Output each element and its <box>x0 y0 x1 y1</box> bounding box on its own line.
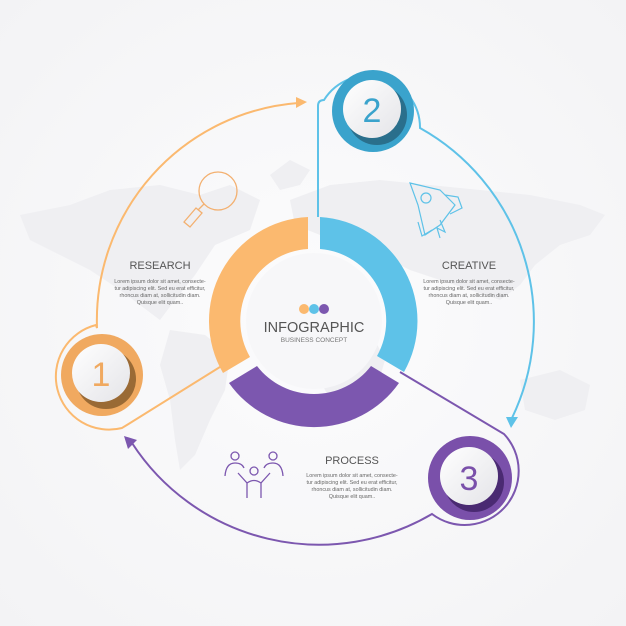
purple connector with arrow <box>124 372 519 545</box>
center title: INFOGRAPHIC <box>264 320 364 336</box>
world map background <box>20 160 605 470</box>
text block: process: tur adipiscing elit. Sed eu erat efficitur, <box>306 480 398 486</box>
orange connector with arrow <box>56 97 307 430</box>
number circle 2 <box>332 70 414 152</box>
icon: people <box>225 452 283 498</box>
text block: creative: tur adipiscing elit. Sed eu erat efficitur, <box>424 286 515 292</box>
center ring <box>209 217 417 427</box>
number circle 3: 3 <box>460 460 478 498</box>
text block: research <box>114 260 206 306</box>
text block: research: Lorem ipsum dolor sit amet, consecte- <box>114 279 206 285</box>
number circle 2: 2 <box>363 92 381 130</box>
center title <box>264 304 364 344</box>
text block: research: Quisque elit quam.. <box>137 300 183 306</box>
text block: creative: Lorem ipsum dolor sit amet, consecte- <box>423 279 515 285</box>
text block: creative: rhoncus diam at, sollicitudin diam. <box>429 293 509 299</box>
text block: process: Lorem ipsum dolor sit amet, consecte- <box>306 473 398 479</box>
text block: research: RESEARCH <box>129 260 191 272</box>
icon: rocket <box>410 183 462 238</box>
blue connector with arrow <box>318 76 534 428</box>
number circle 3 <box>428 436 512 520</box>
text block: creative <box>423 260 515 306</box>
text block: process: Quisque elit quam.. <box>329 494 375 500</box>
text block: creative: CREATIVE <box>442 260 496 272</box>
text block: research: tur adipiscing elit. Sed eu erat efficitur, <box>114 286 206 292</box>
text block: process: PROCESS <box>325 455 379 467</box>
text block: creative: Quisque elit quam.. <box>446 300 492 306</box>
text block: process: rhoncus diam at, sollicitudin diam. <box>312 487 392 493</box>
text block: research: rhoncus diam at, sollicitudin diam. <box>120 293 200 299</box>
center title: BUSINESS CONCEPT <box>281 337 347 344</box>
number circle 1 <box>61 334 143 416</box>
number circle 1: 1 <box>92 356 110 394</box>
icon: magnifier <box>184 172 237 227</box>
text block: process <box>306 455 398 500</box>
